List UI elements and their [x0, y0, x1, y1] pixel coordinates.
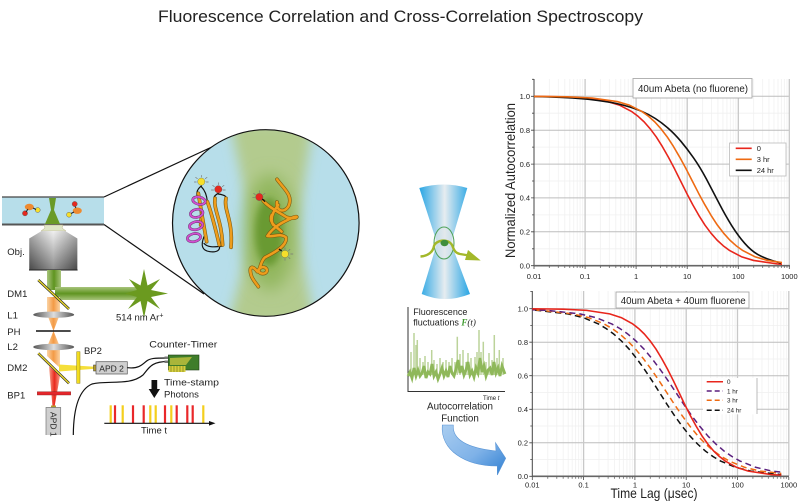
dichroic mirror DM2 — [38, 353, 69, 383]
chart: 40um Abeta no fluorene — [486, 78, 800, 281]
y tick labels: 1.0 — [520, 92, 530, 101]
chart title box — [633, 78, 752, 98]
filter BP1 — [37, 392, 71, 395]
curved blue arrow — [442, 425, 506, 475]
detector APD 1 — [46, 406, 61, 437]
chart title box: 40um Abeta + 40um fluorene — [621, 296, 746, 307]
legend: 0 — [757, 144, 761, 153]
pinhole PH — [36, 330, 71, 332]
circle outline — [172, 130, 359, 316]
detector APD 2: APD 2 — [99, 363, 124, 373]
red and yellow split beams — [49, 364, 95, 407]
curve: black dashed 24 hr — [535, 310, 782, 476]
laser star — [125, 269, 168, 318]
counter-timer label: Counter-Timer — [149, 340, 217, 351]
y tick labels: 0.8 — [520, 126, 530, 135]
y tick labels — [520, 92, 530, 270]
legend — [703, 378, 757, 415]
y tick labels: 0.8 — [518, 338, 528, 347]
down arrow — [149, 380, 160, 398]
magnification lines — [104, 146, 214, 294]
x tick labels: 10 — [682, 480, 690, 490]
time-stamp label: Time-stamp — [164, 378, 219, 389]
sample chamber band — [2, 197, 104, 224]
y tick labels: 0.4 — [518, 405, 528, 414]
filter BP2 — [77, 352, 80, 383]
legend: 3 hr — [727, 398, 738, 405]
component labels: PH — [7, 327, 21, 338]
curves — [532, 308, 782, 476]
curves — [534, 96, 782, 265]
trace axes — [408, 307, 505, 392]
chart title box — [616, 292, 749, 308]
curve: red solid 0 — [532, 308, 782, 476]
photon time-stamp pulse train: Time t — [141, 425, 167, 436]
y tick labels: 0.6 — [520, 160, 530, 169]
axes — [531, 79, 790, 269]
y tick labels: 0.6 — [518, 371, 528, 380]
y axis title: Normalized Autocorrelation — [502, 103, 518, 258]
grid — [532, 291, 789, 476]
chart: 40um Abeta plus 40um fluorene — [518, 291, 797, 501]
lens L1 — [33, 312, 74, 318]
x tick labels: 0.01 — [527, 272, 541, 281]
y tick labels: 0.0 — [520, 261, 530, 270]
component labels: L2 — [7, 342, 18, 353]
folded protein with donor and acceptor dyes — [187, 175, 231, 252]
trace heading: Fluorescence — [413, 307, 467, 317]
detector APD 2 — [94, 362, 127, 374]
title: Fluorescence Correlation and Cross-Correlation Spectroscopy — [158, 7, 644, 26]
curve: orange dashed 3 hr — [532, 309, 782, 474]
y tick labels: 0.0 — [518, 472, 528, 481]
trace baseline — [408, 358, 505, 379]
photon time-stamp pulse train — [104, 405, 216, 436]
green focal volume — [228, 122, 315, 325]
x tick labels: 1 — [634, 272, 638, 281]
trace heading: F(t) — [461, 317, 476, 327]
legend: 24 hr — [727, 408, 741, 415]
curve: red 0 — [534, 96, 782, 265]
component labels: BP1 — [7, 390, 25, 401]
x tick labels: 0.1 — [578, 480, 589, 490]
detector cables — [73, 358, 168, 435]
curve: black 24 hr — [534, 96, 781, 263]
objective lens — [29, 225, 78, 270]
spikes — [411, 330, 503, 375]
legend: 0 — [727, 379, 731, 386]
x tick labels: 1000 — [781, 272, 798, 281]
blue laser hourglass — [419, 184, 470, 299]
autocorrelation function label: Function — [441, 413, 479, 424]
grid — [534, 79, 789, 266]
panel: confocal FCS instrument schematic — [2, 146, 219, 437]
trace heading: fluctuations — [413, 317, 461, 327]
curve: orange 3 hr — [534, 96, 782, 264]
orange emission beam — [47, 297, 60, 368]
lens L2 — [33, 344, 74, 350]
curve: purple dashed 1 hr — [532, 309, 780, 473]
legend: 1 hr — [727, 388, 738, 395]
detector APD 1: APD 1 — [48, 412, 58, 437]
legend — [730, 143, 786, 176]
autocorrelation function label: Autocorrelation — [427, 401, 493, 412]
molecule — [440, 240, 448, 246]
component labels — [7, 247, 102, 401]
component labels: DM2 — [7, 363, 27, 374]
legend: 3 hr — [757, 155, 770, 164]
panel: magnified focal volume circle — [172, 122, 359, 325]
component labels: Obj. — [7, 247, 25, 258]
axes — [529, 291, 789, 480]
x tick labels: 100 — [731, 480, 744, 490]
dichroic mirror DM1 core — [38, 280, 69, 309]
x tick labels: 0.1 — [580, 272, 590, 281]
x tick labels — [527, 272, 798, 281]
panel: diffusion focus illustration — [419, 184, 481, 299]
y tick labels — [518, 304, 528, 481]
x tick labels: 0.01 — [525, 480, 540, 490]
component labels: L1 — [7, 310, 18, 321]
y tick labels: 0.4 — [520, 194, 530, 203]
unfolded tangled protein with dyes — [250, 179, 297, 287]
panel: fluorescence fluctuation trace — [408, 307, 505, 402]
dichroic mirror DM2 core — [38, 353, 69, 383]
x tick labels: 1000 — [780, 480, 797, 490]
x tick labels: 100 — [732, 272, 745, 281]
green molecule trajectory arrow — [420, 241, 481, 260]
x axis title: Time Lag (μsec) — [610, 485, 698, 501]
component labels: BP2 — [84, 346, 102, 357]
x tick labels: 10 — [683, 272, 691, 281]
time-stamp label: Photons — [164, 389, 199, 400]
green excitation beam — [47, 270, 143, 300]
laser label: 514 nm Ar — [116, 313, 159, 324]
observation ellipse — [434, 227, 454, 259]
dichroic mirror DM1 — [38, 280, 69, 309]
y tick labels: 0.2 — [520, 228, 530, 236]
y tick labels: 0.2 — [518, 438, 528, 448]
x tick labels — [525, 480, 797, 490]
legend: 24 hr — [757, 166, 774, 175]
y tick labels: 1.0 — [518, 304, 528, 313]
component labels: DM1 — [7, 289, 27, 300]
chart title box: 40um Abeta (no fluorene) — [638, 84, 748, 95]
laser label: + — [159, 313, 163, 320]
x tick labels: 1 — [633, 480, 637, 490]
time axis label: Time t — [483, 396, 500, 402]
counter-timer circuit board — [164, 355, 199, 372]
